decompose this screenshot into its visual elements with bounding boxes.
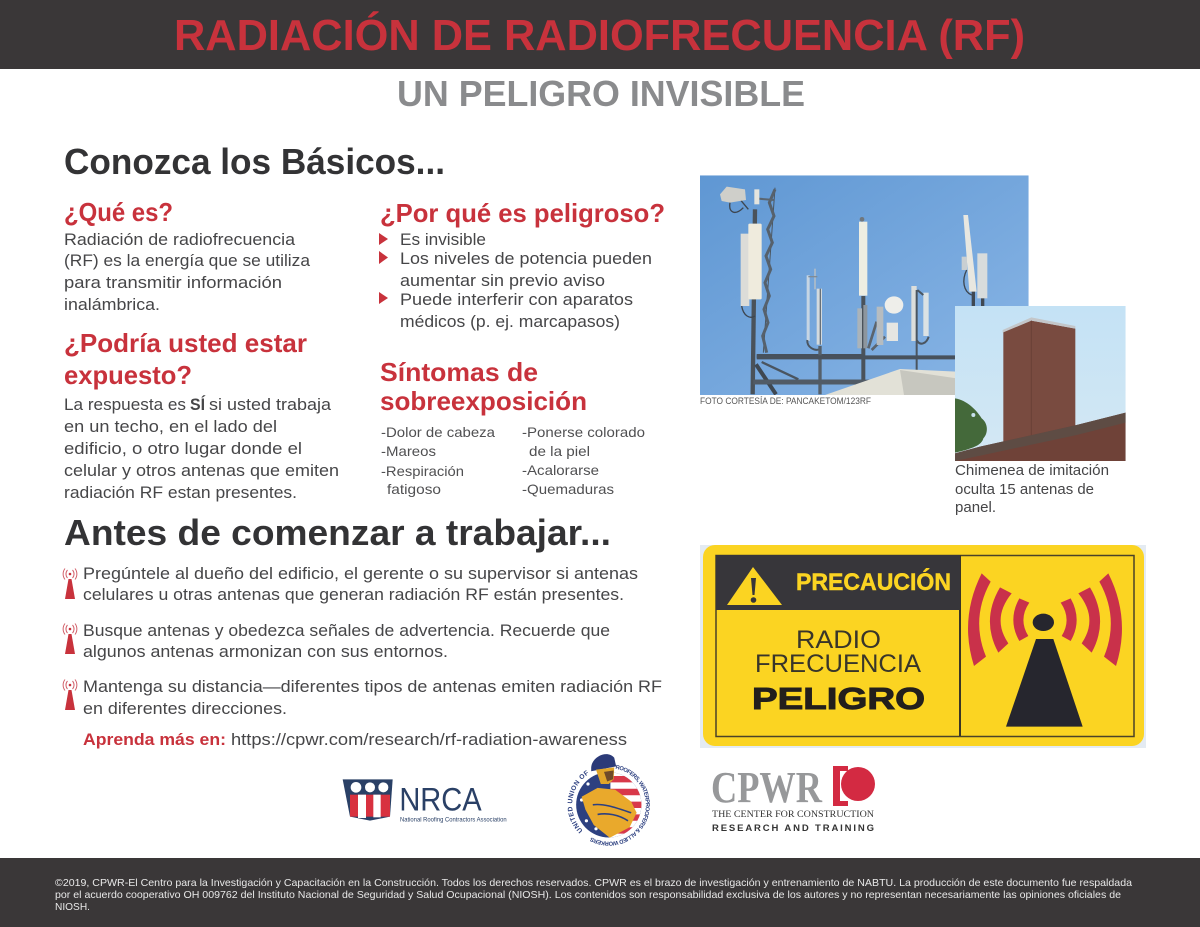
text: definition: inalámbrica. [64, 296, 160, 314]
logo: roofers union: ROOFERS, WATERPROOFERS & ALLIED WORKERS [590, 764, 650, 846]
logo: CPWR: RESEARCH AND TRAINING [712, 823, 874, 834]
footer text: NIOSH. [55, 901, 90, 913]
warning sign [700, 545, 1146, 748]
sign text [752, 626, 925, 716]
text: step 2 [83, 622, 610, 661]
footer text [55, 877, 1132, 913]
list: symptoms left: -Dolor de cabeza [381, 424, 495, 440]
list: symptoms left [381, 424, 495, 497]
text: exposure answer [64, 395, 339, 502]
sign text: RADIO [796, 626, 881, 654]
text: step 2: Busque antenas y obedezca señales de advertencia. Recuerde que [83, 622, 610, 640]
bullet list: dangers: médicos (p. ej. marcapasos) [400, 313, 620, 331]
bullet list: dangers: Puede interferir con aparatos [400, 291, 633, 309]
icon: antenna 2 [63, 624, 77, 654]
link: learn more: Aprenda más en: [83, 731, 226, 749]
panel: could you be exposed [64, 328, 339, 502]
icon: radiation beacon [968, 573, 1122, 727]
list: symptoms left: -Mareos [381, 443, 436, 459]
bullet list: dangers [379, 231, 652, 331]
sign text: FRECUENCIA [755, 650, 921, 678]
logo: CPWR: THE CENTER FOR CONSTRUCTION [712, 810, 874, 820]
panel: what is it [64, 197, 311, 314]
caption: chimney [955, 462, 1109, 516]
text: step 1: Pregúntele al dueño del edificio, el gerente o su supervisor si antenas [83, 565, 638, 583]
heading: before work: Antes de comenzar a trabajar... [64, 512, 611, 553]
panel: steps [63, 565, 662, 749]
photo: rooftop antennas [700, 175, 1029, 395]
logo: NRCA [343, 779, 507, 824]
caption: chimney: Chimenea de imitación [955, 462, 1109, 479]
text: exposure answer: si usted trabaja [209, 396, 332, 414]
text: step 2: algunos antenas armonizan con sus entornos. [83, 643, 448, 661]
panel: why dangerous [379, 198, 665, 331]
list: symptoms left: -Respiración [381, 463, 464, 479]
heading: exposed: expuesto? [64, 360, 192, 390]
subtitle: UN PELIGRO INVISIBLE [397, 73, 805, 114]
sign header [716, 555, 960, 610]
list: symptoms right: -Quemaduras [522, 481, 614, 497]
title: RADIACIÓN DE RADIOFRECUENCIA (RF) [174, 10, 1025, 60]
logo: roofers union [568, 754, 650, 846]
sign text: PELIGRO [752, 681, 925, 716]
list: symptoms right: -Acalorarse [522, 462, 599, 478]
logo: NRCA: NRCA [399, 782, 482, 818]
text: step 1 [83, 565, 638, 604]
text: step 3 [83, 678, 662, 718]
logo: CPWR: CPWR [711, 763, 823, 812]
bullet list: dangers: Los niveles de potencia pueden [400, 250, 652, 268]
title banner [0, 0, 1200, 69]
link: learn more [83, 731, 627, 749]
text: step 1: celulares u otras antenas que generan radiación RF están presentes. [83, 586, 624, 604]
text: exposure answer: La respuesta es [64, 396, 186, 414]
list: symptoms right [522, 424, 645, 497]
caption: photo credit: FOTO CORTESÍA DE: PANCAKETOM/123RF [700, 396, 871, 406]
text: step 3: Mantenga su distancia—diferentes tipos de antenas emiten radiación RF [83, 678, 662, 696]
heading: symptoms: Síntomas de [380, 357, 538, 387]
logo: CPWR [711, 763, 875, 834]
text: definition [64, 231, 311, 314]
text: exposure answer: radiación RF estan presentes. [64, 484, 297, 502]
logo: NRCA: National Roofing Contractors Association [400, 817, 507, 824]
heading: why dangerous: ¿Por qué es peligroso? [380, 198, 665, 228]
text: exposure answer: SÍ [190, 395, 205, 414]
tower and left antennas [720, 187, 863, 394]
logo: roofers union: UNITED UNION OF [568, 770, 588, 834]
caption: chimney: oculta 15 antenas de [955, 481, 1094, 498]
footer text: por el acuerdo cooperativo OH 009762 del Instituto Nacional de Seguridad y Salud Ocupacional (NIOSH). Los contenidos son responsabilidad exclusiva de los autores y no representan necesariamente las opiniones oficiales de [55, 889, 1121, 901]
heading: what is it: ¿Qué es? [64, 197, 173, 227]
center and right antennas [753, 215, 987, 395]
text: exposure answer: celular y otros antenas que emiten [64, 462, 339, 480]
text: definition: Radiación de radiofrecuencia [64, 231, 296, 249]
photo: fake chimney [955, 306, 1126, 461]
heading: exposed: ¿Podría usted estar [64, 328, 307, 358]
text: step 3: en diferentes direcciones. [83, 700, 287, 718]
panel: symptoms [380, 357, 645, 497]
list: symptoms left: fatigoso [387, 481, 441, 497]
link: learn more: https://cpwr.com/research/rf-radiation-awareness [231, 731, 627, 749]
list: symptoms right: -Ponerse colorado [522, 424, 645, 440]
footer text: ©2019, CPWR-El Centro para la Investigación y Capacitación en la Construcción. Todos los derechos reservados. CPWR es el brazo de investigación y entrenamiento de NABTU. La producción de este documento fue respaldada [55, 877, 1132, 889]
bullet list: dangers: aumentar sin previo aviso [400, 272, 605, 290]
heading: basics: Conozca los Básicos... [64, 141, 445, 182]
icon: antenna 1 [63, 568, 77, 599]
text: exposure answer: edificio, o otro lugar donde el [64, 440, 302, 458]
text: definition: (RF) es la energía que se utiliza [64, 252, 311, 270]
icon: antenna 3 [63, 680, 77, 710]
text: exposure answer: en un techo, en el lado del [64, 418, 277, 436]
text: definition: para transmitir información [64, 274, 282, 292]
list: symptoms right: de la piel [529, 443, 590, 459]
heading: symptoms [380, 357, 587, 416]
heading: symptoms: sobreexposición [380, 386, 587, 416]
heading: exposed [64, 328, 307, 390]
footer [0, 858, 1200, 927]
sign header: PRECAUCIÓN [796, 568, 951, 596]
bullet list: dangers: Es invisible [400, 231, 486, 249]
caption: chimney: panel. [955, 499, 996, 516]
